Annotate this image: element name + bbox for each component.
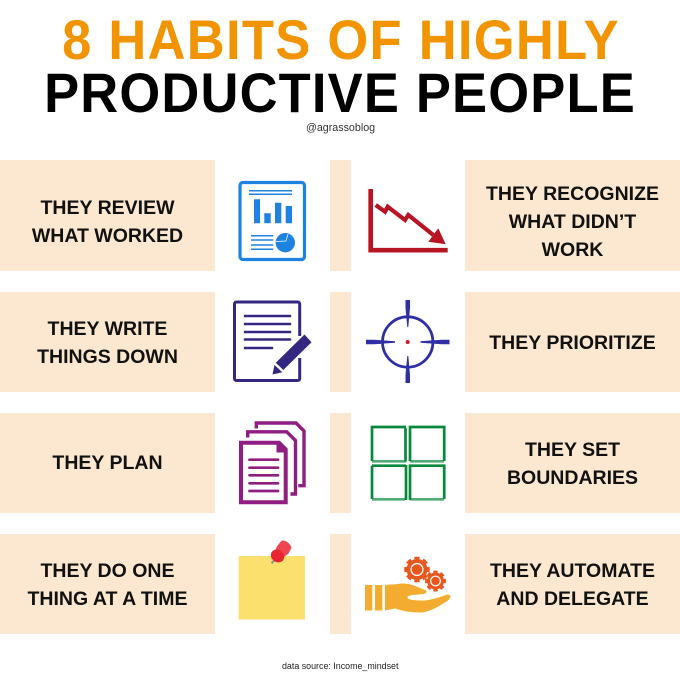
panel: they review what worked: WHAT WORKED: [32, 224, 183, 246]
panel: they recognize what didn't work: [465, 160, 680, 271]
panel: they write things down: THINGS DOWN: [37, 346, 178, 368]
panel: they review what worked: THEY REVIEW: [40, 196, 174, 218]
icon: crosshair target: [366, 300, 450, 383]
data source: data source: Income_mindset: [282, 661, 398, 671]
gear: small: [426, 572, 444, 590]
panel: they prioritize: THEY PRIORITIZE: [489, 332, 656, 354]
panel: they write things down: [0, 292, 215, 392]
panel: they do one thing at a time: THEY DO ONE: [40, 560, 174, 582]
icon: stacked documents: [241, 423, 304, 502]
panel: they plan: [0, 413, 215, 513]
panel: they automate and delegate: [465, 534, 680, 634]
panel: they write things down: THEY WRITE: [48, 318, 167, 340]
panel: they do one thing at a time: [0, 534, 215, 634]
panel: they set boundaries: THEY SET: [525, 439, 620, 461]
panel: they automate and delegate: THEY AUTOMATE: [490, 560, 655, 582]
panel: they review what worked: [0, 160, 215, 271]
centre divider strips: [330, 160, 351, 634]
panel: they do one thing at a time: THING AT A TIME: [28, 588, 187, 610]
panel: they automate and delegate: AND DELEGATE: [496, 588, 649, 610]
handle: @agrassoblog: [306, 122, 375, 134]
panel: they plan: THEY PLAN: [52, 452, 163, 474]
panel: they recognize what didn't work: THEY RECOGNIZE: [486, 182, 659, 204]
icon: report document: [240, 182, 304, 260]
panel: they recognize what didn't work: WHAT DIDN’T: [509, 210, 636, 232]
panel: they prioritize: [465, 292, 680, 392]
icon: sticky note with pin: [239, 541, 305, 620]
gear: large: [406, 558, 428, 580]
icon: falling chart: [371, 189, 448, 250]
panel: they set boundaries: BOUNDARIES: [507, 467, 638, 489]
icon: note with pencil: [234, 302, 312, 380]
title line 1: 8 HABITS OF HIGHLY: [62, 9, 620, 72]
panel: they set boundaries: [465, 413, 680, 513]
panel: they recognize what didn't work: WORK: [542, 238, 603, 260]
icon: four square boundaries: [372, 427, 444, 500]
icon: hand with gears: [365, 558, 450, 613]
title line 2: PRODUCTIVE PEOPLE: [44, 62, 636, 125]
